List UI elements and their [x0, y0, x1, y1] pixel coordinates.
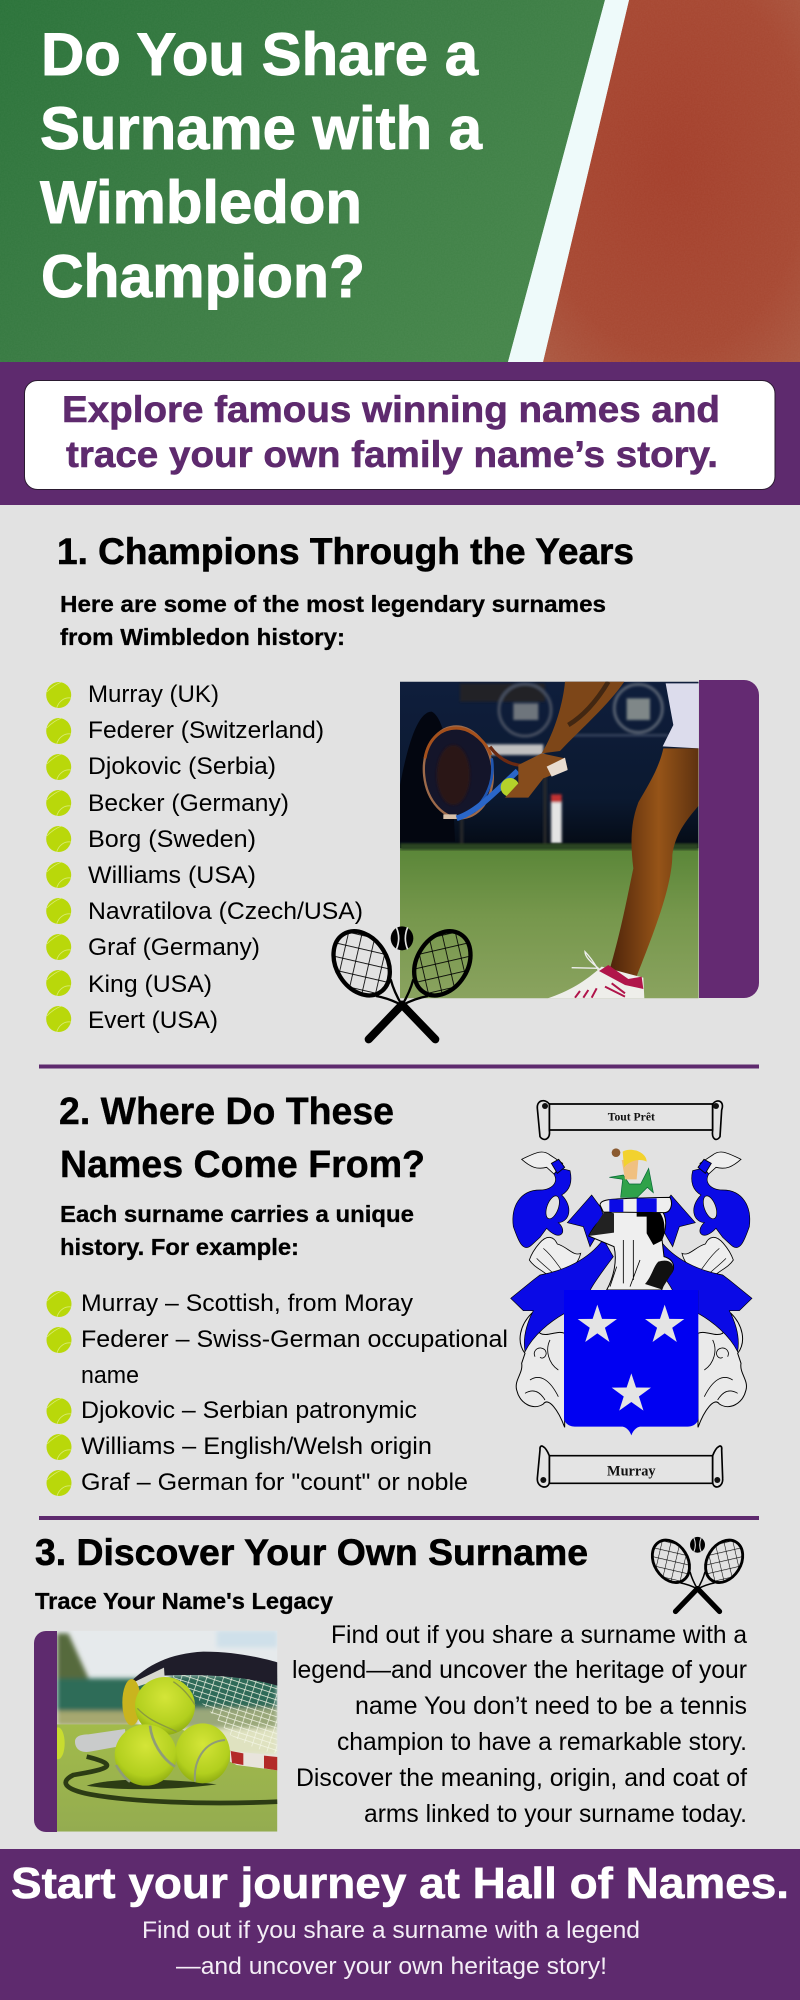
origin item: Williams: Williams – English/Welsh origin — [81, 1433, 432, 1460]
section 1 intro text: from Wimbledon history: — [60, 624, 345, 650]
title — [40, 21, 483, 310]
motto scroll — [537, 1101, 722, 1139]
section 3 body text: arms linked to your surname today. — [364, 1800, 747, 1828]
photo: player serving — [400, 682, 699, 998]
origin item: Graf: Graf – German for "count" or noble — [81, 1469, 468, 1496]
title: Surname with a — [40, 95, 483, 162]
section 2 intro text: Each surname carries a unique — [60, 1201, 414, 1227]
motto scroll: Tout Prêt — [608, 1111, 655, 1124]
origin item: Murray: Murray – Scottish, from Moray — [81, 1290, 414, 1317]
section 3 body text: name You don’t need to be a tennis — [355, 1692, 747, 1720]
champions list — [46, 681, 363, 1034]
surname scroll: Murray — [607, 1463, 656, 1479]
intro callout box — [24, 380, 775, 490]
list item: Evert: Evert (USA) — [88, 1007, 218, 1034]
section 2 heading: Names Come From? — [60, 1144, 425, 1186]
player leg — [610, 748, 699, 979]
section 2 heading: 2. Where Do These — [59, 1091, 394, 1133]
section 2 intro text: history. For example: — [60, 1234, 299, 1260]
list item: Murray: Murray (UK) — [88, 681, 219, 708]
crest torse — [600, 1197, 671, 1213]
origin item: Federer — [46, 1326, 508, 1389]
footer heading: Start your journey at Hall of Names. — [11, 1860, 789, 1908]
footer text — [142, 1917, 640, 1980]
footer text: —and uncover your own heritage story! — [176, 1953, 607, 1980]
section 3 heading: 3. Discover Your Own Surname — [35, 1532, 588, 1573]
section 3 body text — [292, 1621, 747, 1828]
section 1 heading: 1. Champions Through the Years — [57, 531, 634, 572]
purple intro band — [0, 362, 800, 505]
racket handle and throat — [75, 1729, 127, 1752]
player skirt — [663, 683, 699, 748]
list item: Borg: Borg (Sweden) — [88, 826, 256, 853]
racket strings — [170, 1675, 277, 1753]
mantling — [511, 1152, 752, 1427]
player shoe — [548, 952, 644, 998]
icon: small crossed rackets — [645, 1533, 750, 1611]
list item: Becker: Becker (Germany) — [88, 790, 289, 817]
section 2 intro text — [60, 1201, 414, 1260]
list item: Graf: Graf (Germany) — [88, 934, 260, 961]
section 3 subheading: Trace Your Name's Legacy — [35, 1588, 333, 1614]
helmet — [589, 1203, 674, 1290]
divider — [39, 1064, 759, 1068]
origin item: Federer: Federer – Swiss-German occupational — [81, 1326, 508, 1353]
title: Champion? — [41, 243, 365, 310]
intro callout box: Explore famous winning names and — [62, 389, 720, 430]
list item: Williams: Williams (USA) — [88, 862, 256, 889]
list item: Federer: Federer (Switzerland) — [88, 717, 324, 744]
coat of arms: Murray — [511, 1101, 752, 1487]
header banner: tennis court — [0, 0, 800, 362]
shield stars — [578, 1305, 684, 1411]
surname origins list — [46, 1290, 508, 1496]
tennis balls — [51, 1677, 230, 1786]
intro callout box: trace your own family name’s story. — [66, 434, 718, 475]
origin item: Federer: name — [81, 1362, 139, 1389]
photo: tennis balls and racket — [51, 1631, 277, 1832]
purple accent panel beside photo — [34, 1631, 57, 1832]
shadow — [66, 1757, 277, 1803]
racket in photo — [419, 723, 523, 822]
divider — [39, 1516, 759, 1520]
section 3 body text: Find out if you share a surname with a — [331, 1621, 747, 1649]
title: Wimbledon — [40, 169, 362, 236]
section 1 intro text — [60, 591, 606, 650]
section 3 body text: Discover the meaning, origin, and coat of — [296, 1764, 747, 1792]
section 3 body text: legend—and uncover the heritage of your — [292, 1656, 747, 1684]
section 2 heading — [59, 1091, 425, 1186]
list item: Navratilova: Navratilova (Czech/USA) — [88, 898, 363, 925]
origin item: Djokovic: Djokovic – Serbian patronymic — [81, 1397, 417, 1424]
crest: mermaid — [609, 1148, 653, 1197]
footer text: Find out if you share a surname with a legend — [142, 1917, 640, 1944]
shield — [564, 1290, 698, 1435]
title: Do You Share a — [41, 21, 479, 88]
icon: crossed rackets and ball — [322, 921, 482, 1039]
list item: Djokovic: Djokovic (Serbia) — [88, 753, 276, 780]
surname scroll — [537, 1446, 723, 1487]
purple accent panel beside photo — [699, 680, 759, 998]
racket frame — [129, 1652, 277, 1686]
section 1 intro text: Here are some of the most legendary surnames — [60, 591, 606, 617]
section 3 body text: champion to have a remarkable story. — [337, 1728, 747, 1756]
player arm and hand — [542, 682, 624, 753]
footer call to action — [0, 1849, 800, 2000]
list item: King: King (USA) — [88, 971, 212, 998]
